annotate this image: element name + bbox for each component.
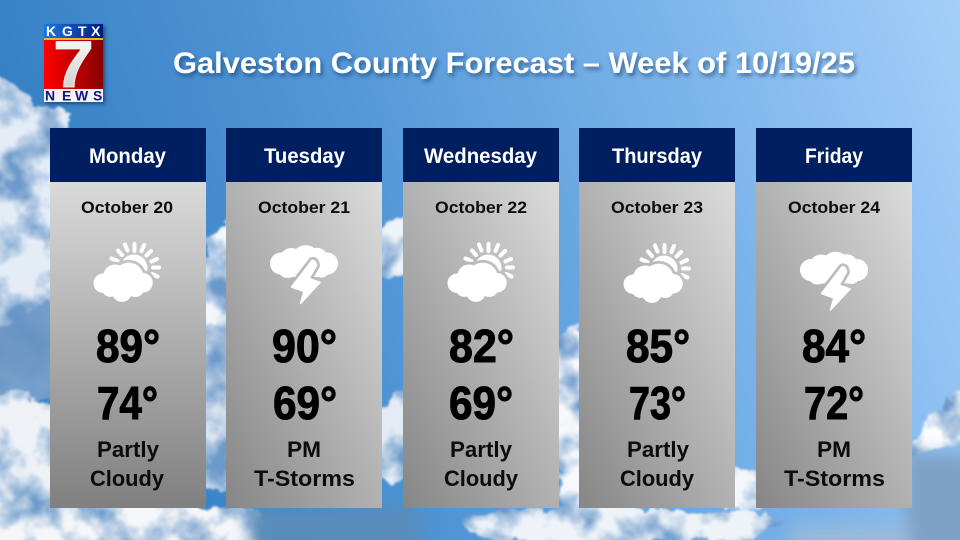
condition: Partly [627,437,690,462]
low temperature: 72° [804,377,864,429]
panel: Monday [50,128,206,508]
high temperature: 89° [96,320,160,372]
date: October 21 [258,198,350,217]
logo call letters: KGTX [46,23,101,39]
condition: T-Storms [784,466,885,491]
icon: thunderstorm [800,252,868,310]
low temperature: 74° [97,377,158,429]
low temperature: 69° [273,377,337,429]
condition: Partly [97,437,160,462]
date: October 24 [788,198,881,217]
logo numeral 7: 7 [53,27,94,101]
condition [620,437,695,491]
panel: Thursday [579,128,735,508]
icon: thunderstorm [270,245,338,304]
date: October 20 [81,198,173,217]
panel: Wednesday [403,128,559,508]
panel: Tuesday [226,128,382,508]
low temperature: 69° [449,377,513,429]
condition: Cloudy [90,466,165,491]
panel: Friday [756,128,912,508]
condition: T-Storms [254,466,355,491]
condition [444,437,519,491]
condition: Cloudy [444,466,519,491]
logo word news: NEWS [45,88,102,104]
condition: PM [287,437,321,462]
condition: PM [817,437,851,462]
day heading: Wednesday [424,145,537,168]
date: October 22 [435,198,527,217]
condition: Cloudy [620,466,695,491]
condition: Partly [450,437,513,462]
icon: partly cloudy [624,245,689,303]
high temperature: 82° [449,320,514,372]
day heading: Tuesday [264,145,345,168]
day heading: Monday [89,145,166,168]
condition [254,437,355,491]
high temperature: 84° [802,320,866,372]
day heading: Thursday [612,145,702,168]
high temperature: 90° [272,320,337,372]
icon: partly cloudy [94,244,159,302]
day heading: Friday [805,145,863,168]
low temperature: 73° [629,377,686,429]
icon: partly cloudy [448,244,513,302]
date: October 23 [611,198,703,217]
title: Galveston County Forecast – Week of 10/19/25 [173,47,855,80]
logo: KGTX 7 News [44,23,103,104]
high temperature: 85° [626,320,690,372]
condition [90,437,165,491]
condition [784,437,885,491]
